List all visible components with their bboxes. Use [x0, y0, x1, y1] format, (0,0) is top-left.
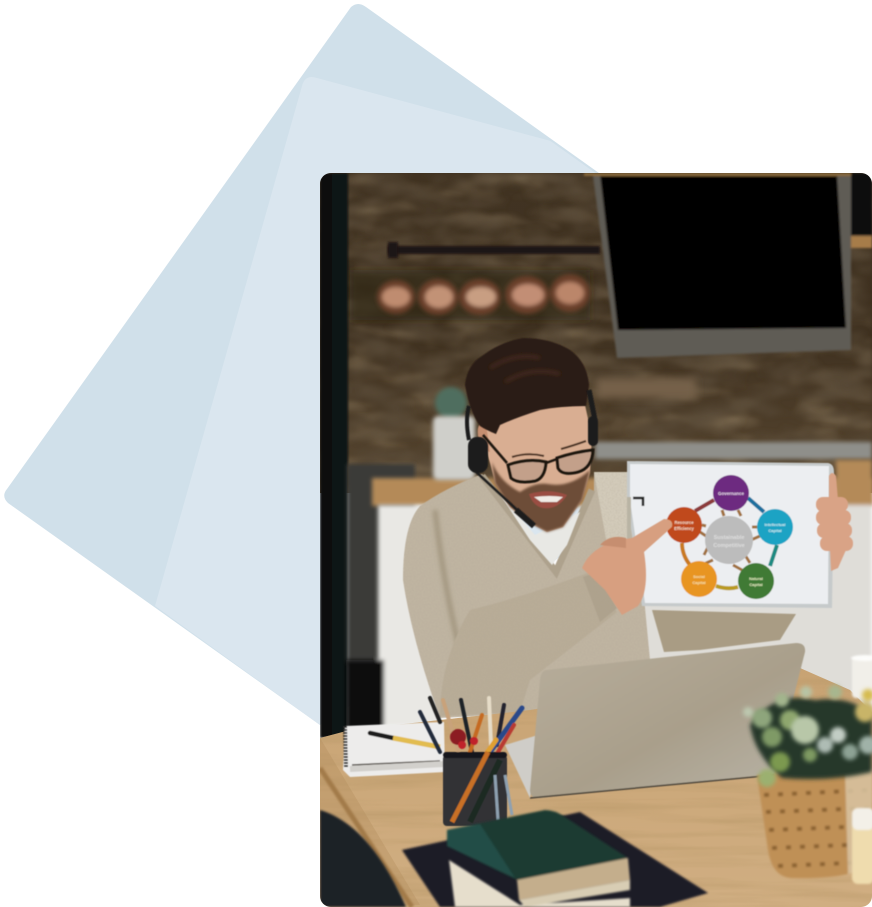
man: hair: [465, 338, 589, 434]
chart: intellectual capital node: [757, 509, 793, 545]
chart: connecting ring: [682, 498, 777, 588]
chart: social capital node: Social: [693, 574, 705, 579]
background diamond: back shape: [4, 4, 700, 725]
chart: governance node: Governance: [718, 491, 745, 496]
mug: [851, 655, 872, 698]
chart: social capital node: Capital: [692, 580, 706, 585]
shelf and plant: [347, 387, 872, 664]
wicker basket: [757, 768, 872, 878]
man: headset: [467, 390, 598, 526]
white cabinets: [346, 460, 872, 732]
dark folder: [402, 812, 708, 907]
chart: intellectual capital node: Intellectual: [765, 522, 785, 527]
notebook and pen: [343, 722, 445, 777]
wooden table: [320, 668, 872, 907]
potted plant foliage: [743, 685, 872, 787]
chart: social capital node: [681, 561, 717, 597]
man: pointing hand: [582, 519, 672, 615]
laptop: [505, 643, 805, 798]
chart: intellectual capital node: Capital: [768, 528, 782, 533]
chart: center node: Sustainable: [714, 535, 744, 541]
chart: natural capital node: Capital: [749, 582, 763, 587]
chart: resource efficiency node: Resource: [674, 520, 694, 525]
man: glasses: [483, 435, 593, 482]
chart: natural capital node: [738, 563, 774, 599]
pencil holder: [420, 698, 522, 826]
man: shirt collar: [500, 496, 580, 566]
brick wall: [320, 173, 872, 493]
chart: center node: [705, 516, 753, 564]
dark left column: [320, 173, 348, 738]
sweater knit texture: [400, 470, 660, 720]
photo: man on a video call presenting a chart: [320, 173, 872, 907]
candle: [852, 808, 872, 884]
chart: resource efficiency node: Efficiency: [674, 526, 695, 531]
chart: center node: Competitive: [713, 543, 745, 549]
background diamond: front shape: [155, 77, 640, 727]
man: right hand holding clipboard: [816, 473, 853, 571]
clipboard with chart: [627, 461, 834, 608]
man: sweater: [403, 472, 796, 718]
chart: governance node: [713, 475, 749, 511]
copper pans on rail: [377, 242, 600, 315]
stacked books: [447, 810, 630, 907]
table grain: [320, 660, 872, 907]
chair: [320, 810, 406, 907]
chart: natural capital node: Natural: [749, 576, 763, 581]
chart: resource efficiency node: [666, 507, 702, 543]
wall-mounted television: [584, 173, 872, 358]
man: face: [478, 405, 592, 532]
